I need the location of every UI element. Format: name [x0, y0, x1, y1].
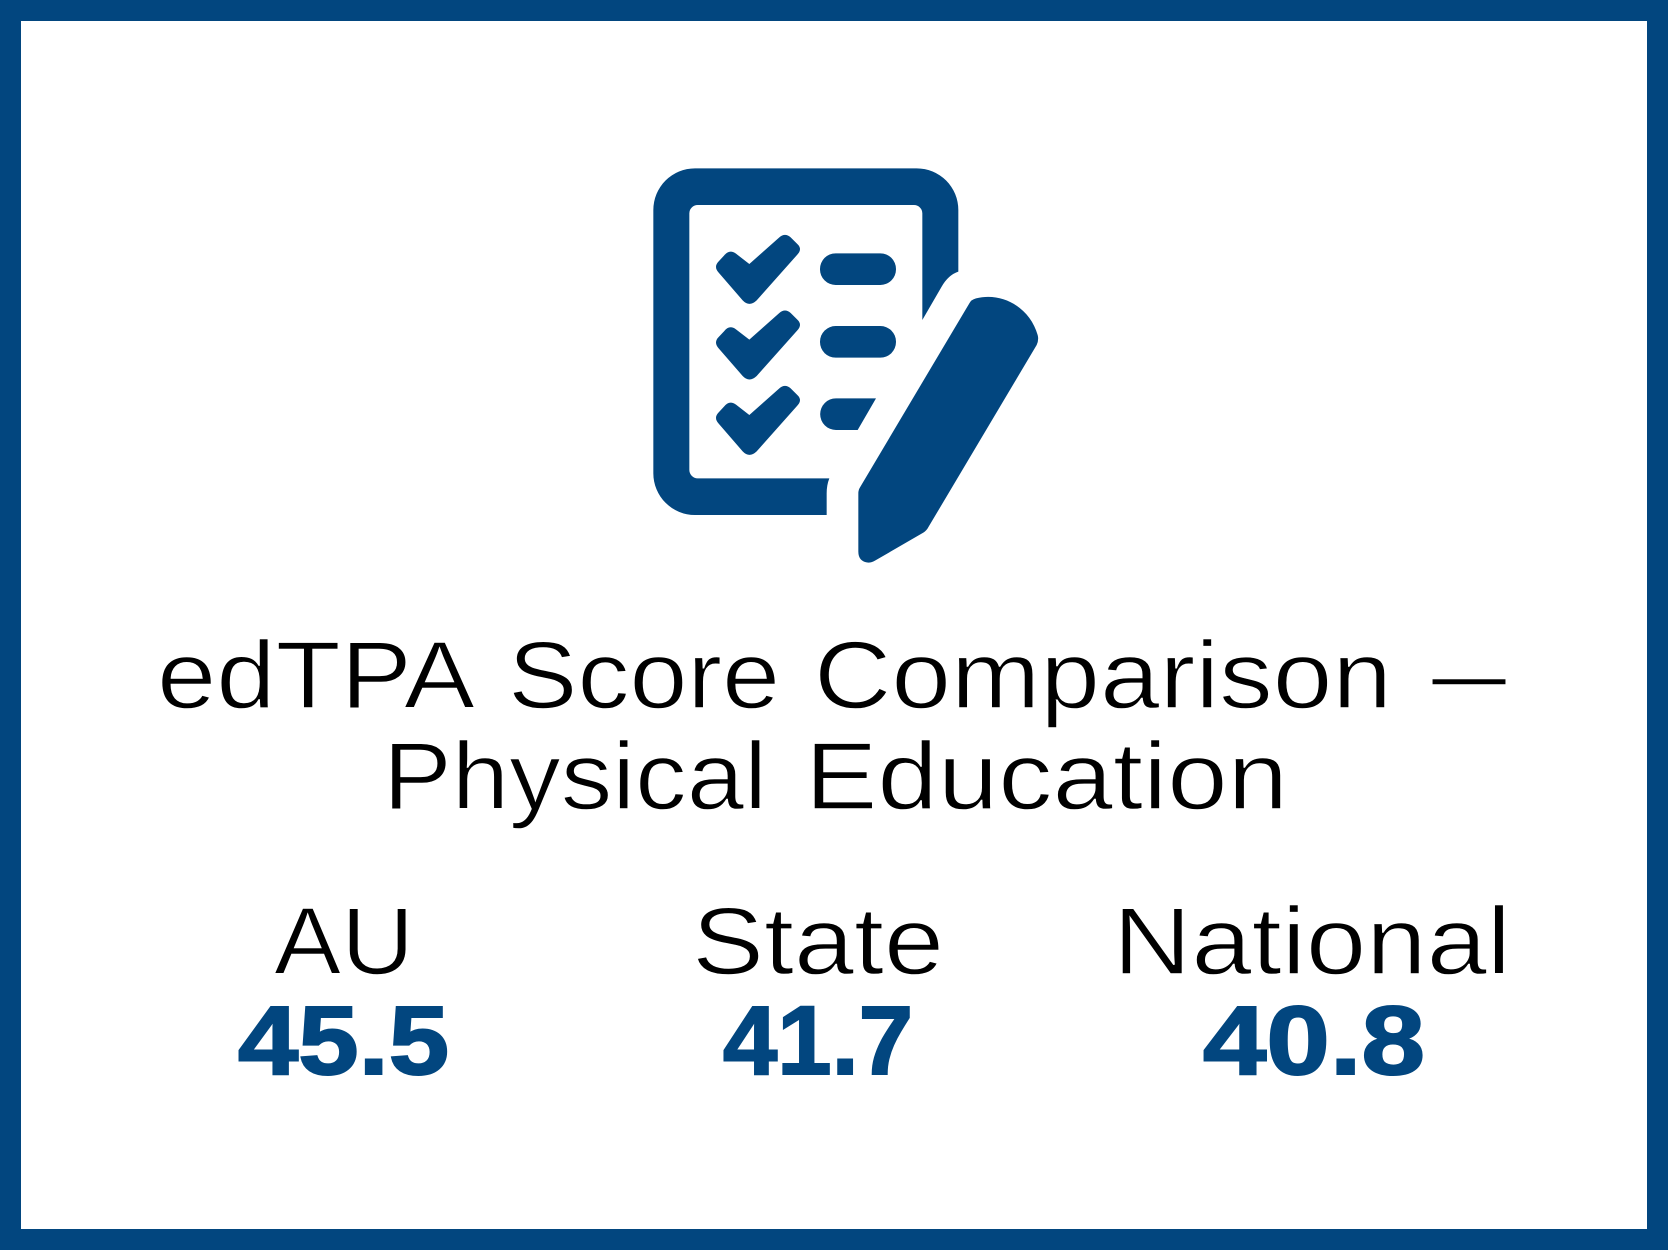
title line 1: —: [1432, 620, 1506, 727]
title line 1: Comparison: [814, 622, 1392, 729]
title line 2: Education: [805, 723, 1288, 830]
column: State: [692, 888, 944, 1095]
title: [157, 620, 1506, 830]
label: National: National: [1113, 888, 1511, 995]
label: State: State: [692, 888, 944, 995]
icon: checklist with pencil: [653, 168, 1038, 563]
column: National: [1113, 888, 1511, 1095]
title line 2: [383, 723, 1288, 830]
title line 1: Score: [508, 622, 780, 729]
icon: second list line: [820, 326, 896, 358]
label: AU: AU: [274, 888, 414, 995]
icon: first list line: [820, 253, 896, 285]
icon: pencil: [858, 297, 1038, 563]
icon: third check mark: [716, 386, 800, 455]
icon: first check mark: [716, 235, 800, 304]
column: AU: [238, 888, 449, 1095]
score: National: 40.8: [1203, 986, 1425, 1095]
title line 2: Physical: [383, 723, 767, 830]
title line 1: edTPA: [157, 622, 475, 729]
score: AU: 45.5: [238, 986, 449, 1095]
score: State: 41.7: [723, 986, 913, 1095]
icon: clipboard document: [653, 168, 958, 515]
title line 1: [157, 620, 1506, 729]
icon: second check mark: [716, 310, 800, 379]
icon: third list line: [820, 398, 876, 430]
